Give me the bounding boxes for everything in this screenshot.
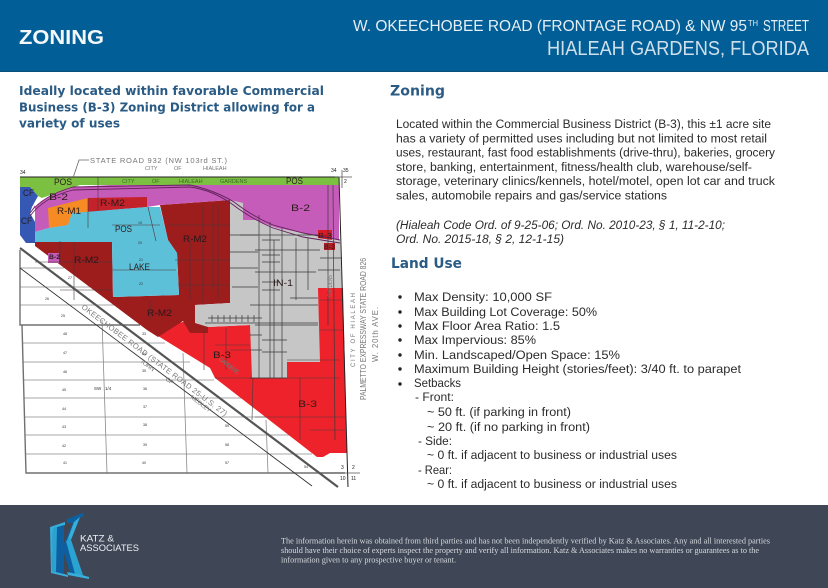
band label: HIALEAH xyxy=(179,179,203,185)
city line: HIALEAH GARDENS, FLORIDA xyxy=(547,38,810,60)
land use list: Setbacks xyxy=(414,376,461,390)
land use list: Max Impervious: 85% xyxy=(414,333,536,347)
zoning description: store, banking, entertainment, fitness/health club, warehouse/self- xyxy=(396,160,752,174)
zone labels: CF xyxy=(21,216,32,227)
parcel numbers: 26 xyxy=(45,297,49,301)
parcel numbers: 25 xyxy=(61,314,65,318)
left headline xyxy=(19,83,324,130)
parcel numbers: 22 xyxy=(139,282,143,286)
parcel numbers: 43 xyxy=(62,425,66,429)
code citation: Ord. No. 2015-18, § 2, 12-1-15) xyxy=(396,232,564,246)
zone labels: B-3 xyxy=(298,399,317,410)
zone labels xyxy=(21,176,336,410)
band label: GARDENS xyxy=(220,179,248,185)
land use list: Max Floor Area Ratio: 1.5 xyxy=(414,319,560,333)
road: Okeechobee xyxy=(20,248,338,487)
parcel lines on zones xyxy=(30,177,345,440)
parcel numbers: 27 xyxy=(68,276,72,280)
logo wordmark: KATZ & xyxy=(80,534,115,544)
zoning area: orange R-M1 xyxy=(48,198,88,228)
left headline: Business (B-3) Zoning District allowing for a xyxy=(19,100,315,114)
disclaimer: information given to any prospective buyer or tenant. xyxy=(281,556,456,564)
diagonal road label: GARDENS xyxy=(217,357,240,376)
code citation xyxy=(396,218,725,246)
disclaimer xyxy=(281,536,770,564)
parcel numbers: 46 xyxy=(63,370,67,374)
zone labels: POS xyxy=(115,224,132,235)
parcel numbers: 57 xyxy=(225,461,229,465)
zoning area: gray IN-1 xyxy=(195,200,342,378)
section numbers: 35 xyxy=(343,168,349,174)
vertical labels: CITY OF HIALEAH xyxy=(351,293,357,367)
leader line xyxy=(73,160,89,178)
land use list: Max Building Lot Coverage: 50% xyxy=(414,305,597,319)
parcel numbers: 42 xyxy=(62,444,66,448)
parcel numbers: 54 xyxy=(304,465,308,469)
land use list: ~ 0 ft. if adjacent to business or industrial uses xyxy=(427,477,677,491)
disclaimer: should have their choice of experts inspect the property and verify all information. Katz & Associates makes no warranties or guarantees as to the xyxy=(281,546,759,555)
parcel numbers: 59 xyxy=(225,424,229,428)
address line: STREET xyxy=(763,18,809,35)
section numbers: 34 xyxy=(20,170,26,176)
city of Hialeah label xyxy=(145,166,227,172)
page title: ZONING xyxy=(19,27,104,49)
zone labels: CF xyxy=(23,188,34,199)
road label: STATE ROAD 932 (NW 103rd ST.) xyxy=(90,156,227,165)
logo xyxy=(50,513,139,579)
zone labels: B-3 xyxy=(324,245,336,251)
bullets xyxy=(398,295,402,386)
gray district parcel lines xyxy=(205,185,342,440)
zoning area: purple B-2 xyxy=(30,185,339,240)
band label: OF xyxy=(152,179,160,185)
parcel numbers: 38 xyxy=(143,423,147,427)
band label: CITY xyxy=(122,179,135,185)
vertical labels: GARDENS xyxy=(328,275,334,297)
section numbers: 3 xyxy=(341,465,344,471)
parcel numbers: 1/4 xyxy=(105,386,112,391)
land use list: - Front: xyxy=(415,390,454,404)
zone labels: IN-1 xyxy=(273,278,293,289)
land use list: Min. Landscaped/Open Space: 15% xyxy=(414,348,620,362)
disclaimer: The information herein was obtained from third parties and has not been independently verified by Katz & Associates. Any and all interested parties xyxy=(281,536,770,546)
parcel numbers: 34 xyxy=(142,352,146,356)
land use list: - Side: xyxy=(418,434,452,448)
zone labels: B-2 xyxy=(49,255,61,261)
zoning description: has a variety of permitted uses including but not limited to most retail xyxy=(396,132,767,146)
zone labels: POS xyxy=(54,177,72,188)
zone labels: R-M2 xyxy=(74,255,99,266)
header band xyxy=(0,0,828,72)
address line: W. OKEECHOBEE ROAD (FRONTAGE ROAD) & NW 95 xyxy=(353,18,747,35)
zoning area: small B-2 xyxy=(48,253,59,263)
zone labels: R-M1 xyxy=(57,206,81,217)
address line: TH xyxy=(748,19,758,28)
zoning area: blue CF xyxy=(20,187,38,243)
east boundary line xyxy=(20,177,348,487)
parcel numbers: 19 xyxy=(138,221,142,225)
section numbers xyxy=(20,168,356,482)
zoning description: uses, restaurant, fast food establishments (drive-thru), bakeries, grocery xyxy=(396,146,776,160)
diagonal road label: OF xyxy=(164,377,174,387)
section numbers: 11 xyxy=(351,476,356,482)
land use list: ~ 20 ft. (if no parking in front) xyxy=(427,420,590,434)
section numbers: 2 xyxy=(344,179,347,185)
footer band xyxy=(0,505,828,588)
land use list: Max Density: 10,000 SF xyxy=(414,290,552,304)
parcel grid xyxy=(20,250,345,473)
zoning map xyxy=(20,156,380,487)
diagonal road label: OKEECHOBEE ROAD (STATE ROAD 25-U.S. 27) xyxy=(80,302,229,418)
code citation: (Hialeah Code Ord. of 9-25-06; Ord. No. 2010-23, § 1, 11-2-10; xyxy=(396,218,725,232)
zone labels: B-2 xyxy=(291,203,310,214)
zone labels: R-M2 xyxy=(100,198,125,209)
zone labels: B-3 xyxy=(318,233,332,240)
land use list: - Rear: xyxy=(418,463,452,477)
parcel numbers: 37 xyxy=(143,405,147,409)
section numbers: 2 xyxy=(352,465,355,471)
parcel numbers: 35 xyxy=(142,369,146,373)
land use list: ~ 50 ft. (if parking in front) xyxy=(427,405,571,419)
logo wordmark: ASSOCIATES xyxy=(80,543,139,554)
left headline: Ideally located within favorable Commercial xyxy=(19,83,324,98)
parcel numbers: 48 xyxy=(63,332,67,336)
diagonal road label: TOWN xyxy=(139,359,155,373)
parcel numbers: SW xyxy=(94,386,102,391)
zone labels: POS xyxy=(286,176,303,187)
land use list: ~ 0 ft. if adjacent to business or industrial uses xyxy=(427,448,677,462)
zone labels: B-3 xyxy=(213,350,231,361)
land use list: Maximum Building Height (stories/feet): 3/40 ft. to parapet xyxy=(414,362,742,376)
band label xyxy=(122,179,248,185)
parcel numbers: 40 xyxy=(142,461,146,465)
parcel numbers: 20 xyxy=(138,241,142,245)
zoning area: bright red B-3 xyxy=(150,288,347,457)
city of Hialeah label: CITY xyxy=(145,166,158,172)
parcel numbers: 39 xyxy=(143,443,147,447)
city of Hialeah label: OF xyxy=(174,166,182,172)
zoning description: sales, automobile repairs and gas/service stations xyxy=(396,188,667,202)
heading: zoning: Zoning xyxy=(390,84,445,100)
parcel numbers: 21 xyxy=(139,258,143,262)
city of Hialeah label: HIALEAH xyxy=(203,166,227,172)
zone labels: LAKE xyxy=(129,262,150,273)
zoning description xyxy=(396,117,776,202)
icon: K monogram xyxy=(50,513,89,579)
zone labels: R-M2 xyxy=(147,308,172,319)
vertical labels xyxy=(328,258,380,400)
parcel numbers: 44 xyxy=(62,407,66,411)
zoning area: small B-3 blocks xyxy=(318,230,335,250)
logo wordmark xyxy=(80,534,139,554)
zoning description: Located within the Commercial Business District (B-3), this ±1 acre site xyxy=(396,117,771,131)
section numbers: 10 xyxy=(340,476,346,482)
zoning area: green POS band xyxy=(20,177,339,198)
zoning area: small R-M2 xyxy=(88,197,147,213)
zoning area: light blue POS and lake xyxy=(35,207,179,297)
vertical labels: PALMETTO EXPRESSWAY STATE ROAD 826 xyxy=(359,258,368,400)
zoning description: storage, veterinary clinics/kennels, hotel/motel, open lot car and truck xyxy=(396,174,776,188)
vertical labels: W. 20th AVE. xyxy=(371,307,380,362)
parcel numbers: 33 xyxy=(142,332,146,336)
section numbers: 34 xyxy=(331,168,337,174)
zone labels: B-2 xyxy=(49,192,68,203)
diagonal road label: MEDLEY xyxy=(189,395,212,414)
parcel numbers: 45 xyxy=(62,388,66,392)
left headline: variety of uses xyxy=(19,116,120,130)
land use list xyxy=(398,290,742,491)
zoning area: dark red R-M2 xyxy=(35,200,230,337)
parcel numbers: 41 xyxy=(63,461,67,465)
parcel numbers: 47 xyxy=(63,351,67,355)
parcel numbers xyxy=(45,221,308,469)
heading: land use: Land Use xyxy=(391,256,462,272)
parcel numbers: 36 xyxy=(143,387,147,391)
parcel numbers: 58 xyxy=(225,443,229,447)
zone labels: R-M2 xyxy=(183,234,207,245)
